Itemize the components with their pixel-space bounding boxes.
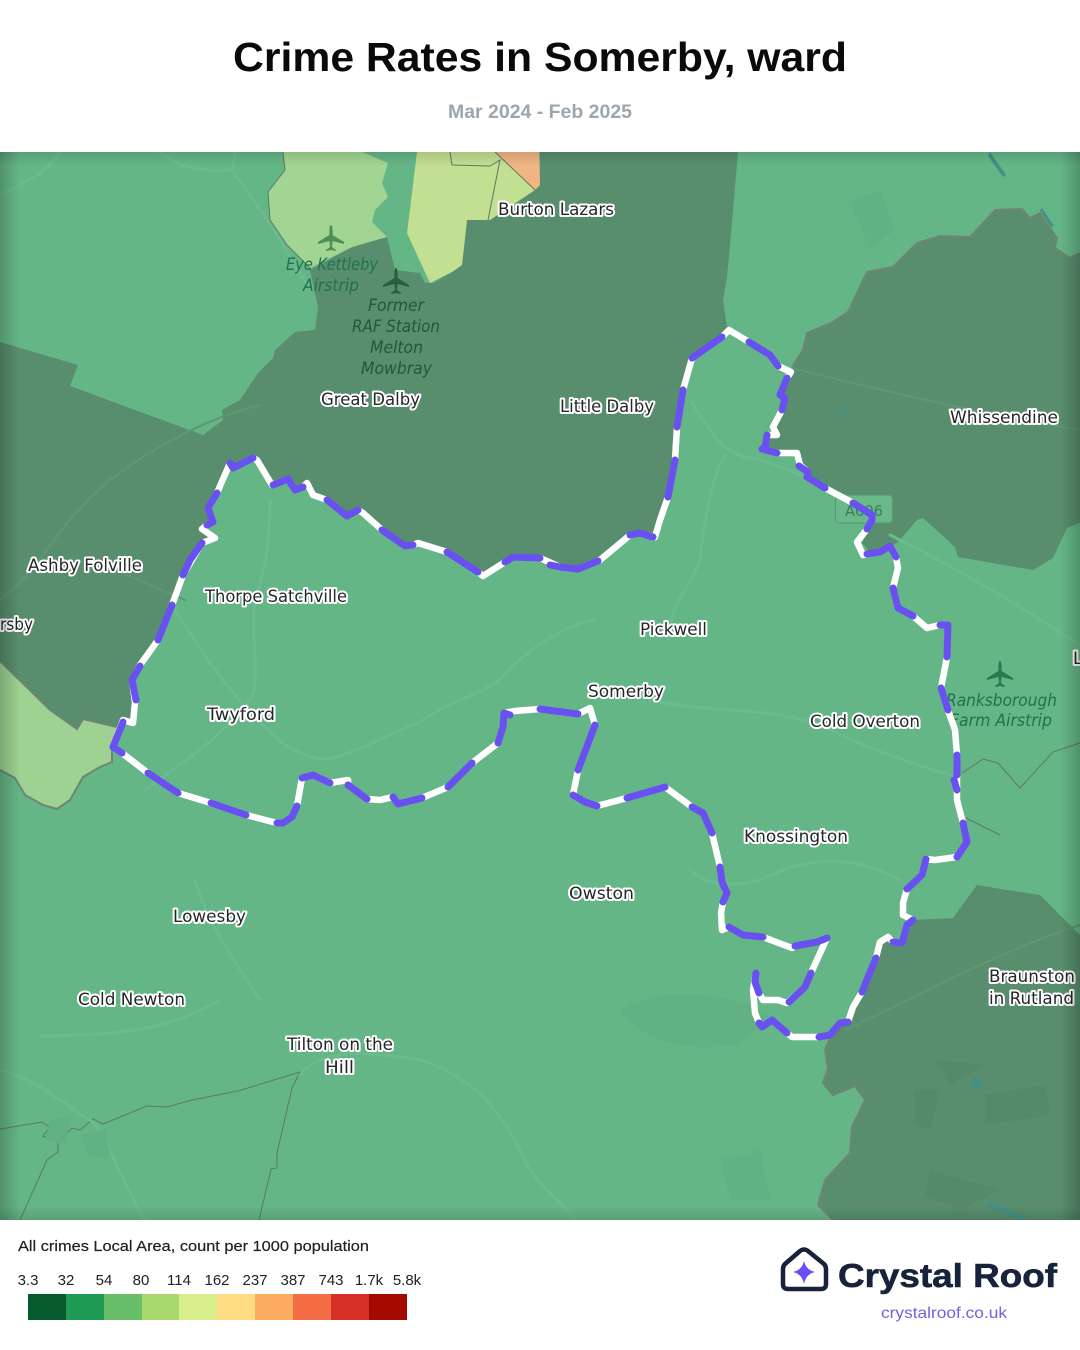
roads and terrain detail — [90, 534, 901, 1122]
airfield labels: Farm Airstrip — [950, 711, 1052, 730]
region: north orange area — [495, 152, 540, 190]
legend — [18, 1238, 422, 1320]
legend scale labels: 1.7k — [355, 1272, 384, 1289]
legend scale labels: 3.3 — [18, 1272, 38, 1289]
airfield labels: Eye Kettleby — [286, 255, 378, 274]
place labels: Owston — [569, 884, 634, 904]
woodland patches — [46, 1126, 110, 1152]
road sign: A606: A606 — [845, 502, 883, 520]
region: south-east dark area — [818, 885, 1080, 1220]
roads on dark areas — [178, 367, 1080, 928]
place labels: Tilton on the — [286, 1035, 393, 1055]
place labels: Twyford — [206, 705, 275, 725]
legend scale labels: 387 — [280, 1272, 306, 1289]
ward boundary: white outline — [113, 330, 967, 1037]
region: north-east dark area — [762, 209, 1080, 570]
legend title: All crimes Local Area, count per 1000 population — [18, 1238, 369, 1255]
legend colour ramp — [28, 1294, 407, 1320]
ward boundary: purple dashes — [113, 337, 967, 1037]
place labels: Braunston — [989, 967, 1075, 987]
airfield labels: Mowbray — [361, 359, 432, 378]
place labels: Pickwell — [640, 620, 707, 640]
map edge vignette — [0, 152, 1080, 1220]
airfield labels: Former — [368, 296, 425, 315]
place labels: Cold Newton — [78, 990, 185, 1010]
place labels: Great Dalby — [321, 390, 420, 410]
place labels: Knossington — [744, 827, 848, 847]
title: Crime Rates in Somerby, ward — [233, 34, 847, 80]
icon: airfield Eye Kettleby — [318, 225, 344, 251]
airfield labels: Airstrip — [302, 276, 359, 295]
place labels — [0, 200, 1080, 1078]
legend scale labels: 114 — [167, 1272, 191, 1289]
legend scale labels: 5.8k — [393, 1272, 422, 1289]
legend scale labels: 80 — [133, 1272, 149, 1289]
woodland patches on dark areas — [915, 1060, 1050, 1210]
choropleth map — [0, 152, 1080, 1220]
logo: Crystal Roof — [783, 1250, 1058, 1322]
region: north yellow-green area — [407, 152, 535, 283]
legend scale labels — [18, 1272, 422, 1289]
region borders — [0, 209, 1080, 1220]
website url: crystalroof.co.uk — [881, 1305, 1008, 1322]
place labels: in Rutland — [989, 989, 1074, 1009]
subtitle: date range: Mar 2024 - Feb 2025 — [448, 102, 632, 123]
region: south-west light area — [0, 661, 117, 809]
place labels: Somerby — [588, 682, 664, 702]
boundary lines — [0, 152, 1080, 1220]
legend scale labels: 54 — [96, 1272, 112, 1289]
airfield labels — [286, 255, 1057, 730]
icon: house with star — [783, 1250, 826, 1289]
wordmark: Crystal Roof — [838, 1257, 1058, 1294]
road sign: A606 — [836, 495, 892, 523]
airfield labels: Ranksborough — [946, 691, 1057, 710]
legend scale labels: 237 — [242, 1272, 268, 1289]
place labels: Whissendine — [950, 408, 1058, 428]
legend scale labels: 743 — [318, 1272, 344, 1289]
place labels: Lowesby — [173, 907, 246, 927]
place labels: Little Dalby — [560, 397, 654, 417]
airfield labels: Melton — [370, 338, 423, 357]
legend scale labels: 32 — [58, 1272, 74, 1289]
place labels: Ashby Folville — [28, 556, 142, 576]
legend scale labels: 162 — [204, 1272, 230, 1289]
place labels: Burton Lazars — [498, 200, 614, 220]
place labels: rsby — [0, 615, 33, 635]
region: north light green area — [268, 152, 388, 268]
icon: airfield Ranksborough — [987, 661, 1013, 687]
airfield labels: RAF Station — [352, 317, 440, 336]
place labels: Cold Overton — [810, 712, 920, 732]
water features — [840, 152, 1054, 1220]
icon: airfield Former RAF Station — [383, 268, 409, 294]
map base area — [0, 152, 1080, 1220]
region: central-west high band — [0, 152, 738, 747]
place labels: Hill — [325, 1058, 354, 1078]
place labels: Thorpe Satchville — [204, 587, 347, 607]
